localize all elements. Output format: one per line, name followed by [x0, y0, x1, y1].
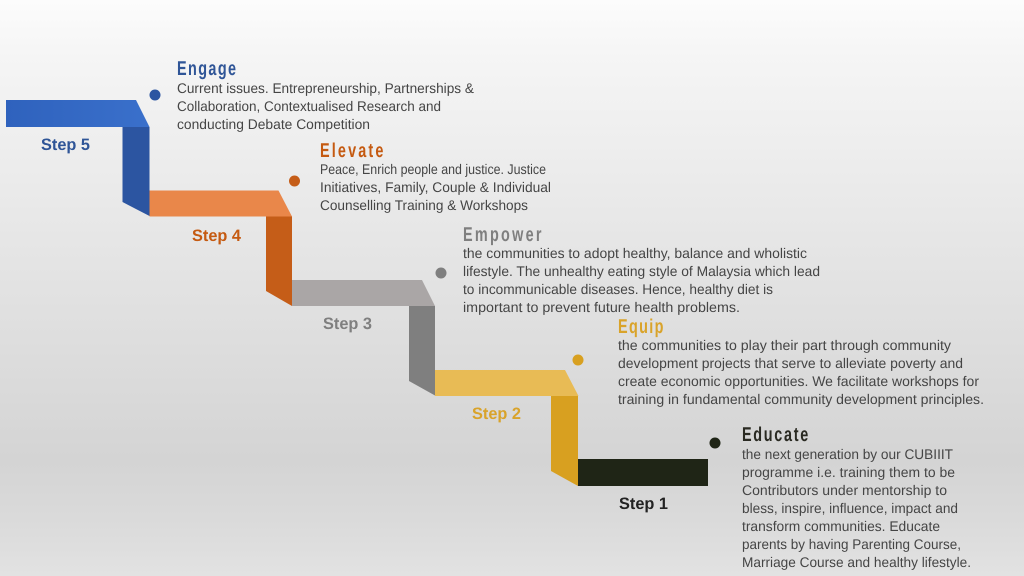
- Empower description: lifestyle. The unhealthy eating style of Malaysia which lead: [463, 263, 820, 279]
- Engage description: [177, 80, 475, 132]
- Empower heading: Empower: [463, 224, 542, 246]
- step 5 marker dot: [150, 90, 160, 100]
- Educate description: Marriage Course and healthy lifestyle.: [742, 554, 971, 570]
- Educate description: programme i.e. training them to be: [742, 464, 955, 480]
- step 1 ribbon: [578, 459, 708, 486]
- Educate description: bless, inspire, influence, impact and: [742, 500, 958, 516]
- step 5 ribbon: [6, 100, 150, 216]
- Educate heading: Educate: [742, 424, 808, 446]
- step 2 ribbon: [435, 370, 578, 486]
- Elevate heading: Elevate: [320, 140, 383, 162]
- Empower description: important to prevent future health problems.: [463, 299, 740, 315]
- Engage description: conducting Debate Competition: [177, 116, 370, 132]
- step 4 marker dot: [289, 176, 300, 186]
- step 1 marker dot: [710, 438, 720, 448]
- step 5 label: Step 5: [41, 136, 90, 154]
- Equip description: [618, 337, 984, 407]
- step 4 label: Step 4: [192, 227, 242, 245]
- Engage description: Current issues. Entrepreneurship, Partnerships &: [177, 80, 475, 96]
- Empower description: [463, 245, 820, 315]
- step 3: Empower: [292, 224, 820, 396]
- Educate description: Contributors under mentorship to: [742, 482, 947, 498]
- Educate description: transform communities. Educate: [742, 518, 940, 534]
- Empower description: to incommunicable diseases. Hence, healthy diet is: [463, 281, 773, 297]
- Equip heading: Equip: [618, 316, 663, 338]
- Elevate description: Initiatives, Family, Couple & Individual: [320, 179, 551, 195]
- Empower description: the communities to adopt healthy, balance and wholistic: [463, 245, 807, 261]
- step 1: Educate: [578, 424, 971, 570]
- step 1 label: Step 1: [619, 495, 668, 513]
- step 4: Elevate: [150, 140, 551, 306]
- step 2 label: Step 2: [472, 405, 521, 423]
- Elevate description: [320, 161, 551, 213]
- Elevate description: Counselling Training & Workshops: [320, 197, 528, 213]
- Equip description: training in fundamental community development principles.: [618, 391, 984, 407]
- Engage heading: Engage: [177, 58, 236, 80]
- Educate description: the next generation by our CUBIIIT: [742, 446, 953, 462]
- step 2 marker dot: [572, 354, 584, 366]
- Engage description: Collaboration, Contextualised Research and: [177, 98, 441, 114]
- step 4 ribbon: [150, 190, 292, 306]
- Equip description: the communities to play their part through community: [618, 337, 951, 353]
- step 3 ribbon: [292, 280, 435, 396]
- step 5: Engage: [6, 58, 475, 216]
- step 3 marker dot: [436, 268, 446, 278]
- Equip description: create economic opportunities. We facilitate workshops for: [618, 373, 979, 389]
- Elevate description: Peace, Enrich people and justice. Justice: [320, 161, 546, 177]
- Equip description: development projects that serve to alleviate poverty and: [618, 355, 963, 371]
- step 3 label: Step 3: [323, 315, 372, 333]
- Educate description: [742, 446, 971, 570]
- Educate description: parents by having Parenting Course,: [742, 536, 961, 552]
- step 2: Equip: [435, 316, 984, 486]
